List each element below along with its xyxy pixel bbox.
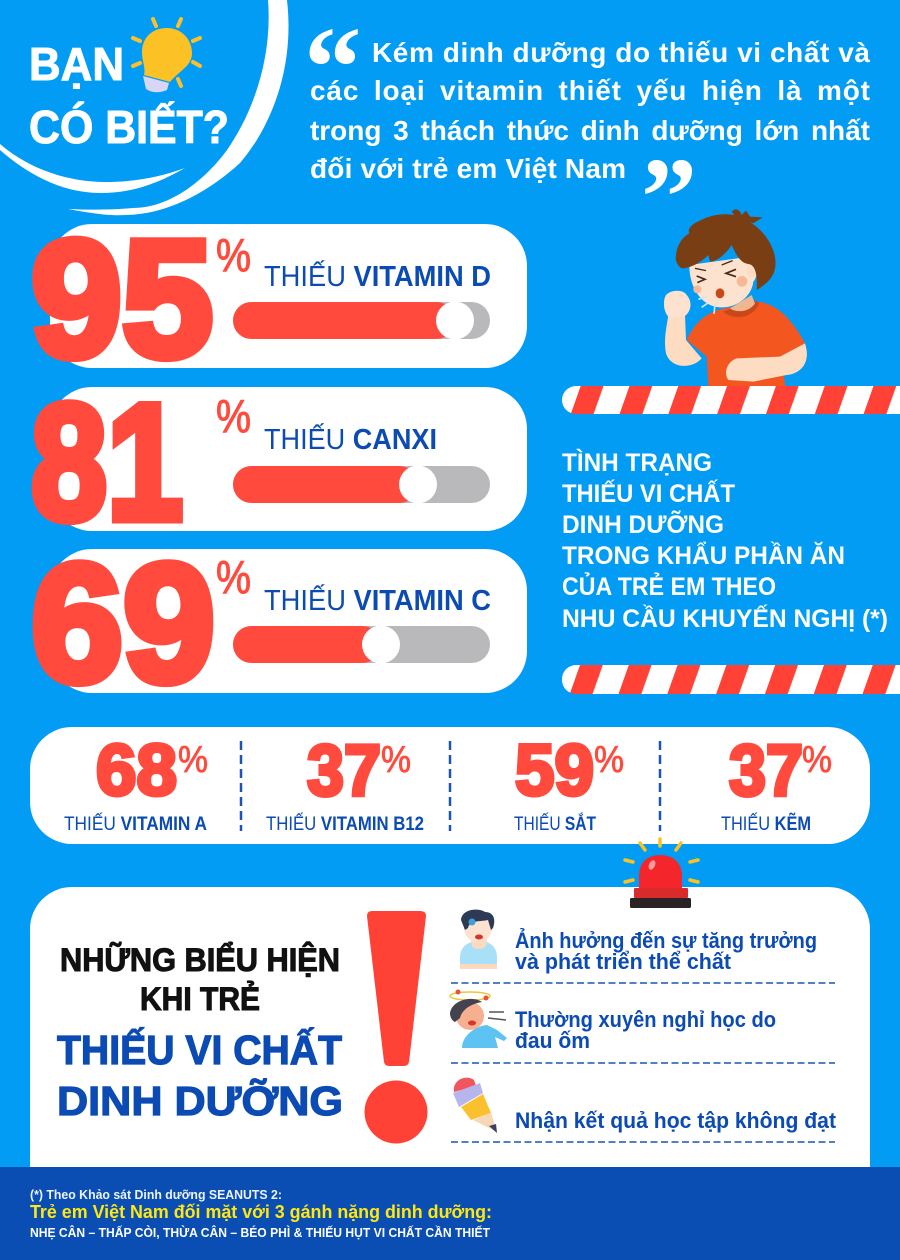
symptoms heading (57, 942, 343, 1124)
section title: THIẾU VI CHẤT (562, 479, 735, 508)
symptoms heading: KHI TRẺ (140, 981, 260, 1017)
quote text: đối với trẻ em Việt Nam (310, 153, 626, 184)
symptoms heading: THIẾU VI CHẤT (57, 1027, 342, 1073)
item 2 text: Thường xuyên nghỉ học do (515, 1007, 776, 1032)
big number: 81 (31, 370, 183, 554)
progress bar (233, 626, 490, 664)
progress bar (233, 302, 490, 340)
icon: closing quote: ” (641, 136, 697, 260)
stat: zinc: 37 (729, 731, 803, 811)
stat: vitamin A: 68 (96, 731, 177, 811)
symptoms heading: DINH DƯỠNG (57, 1078, 343, 1124)
footer (0, 1167, 900, 1260)
icon: red siren (625, 839, 698, 908)
icon: tired child (460, 910, 497, 969)
stat: vitamin A: THIẾU VITAMIN A (64, 813, 207, 835)
footer highlight: Trẻ em Việt Nam đối mặt với 3 gánh nặng dinh dưỡng: (30, 1202, 492, 1222)
item 2 text (515, 1007, 776, 1053)
icon: coughing boy (664, 209, 807, 387)
section title: CỦA TRẺ EM THEO (562, 571, 776, 601)
badge title (29, 38, 229, 153)
badge title: CÓ BIẾT? (29, 101, 229, 153)
stat: iron: % (594, 739, 624, 780)
stat: vitamin A (64, 731, 208, 835)
stat: zinc (721, 731, 832, 835)
striped band top (562, 386, 900, 414)
big number: 95 (31, 207, 213, 392)
section title: TRONG KHẨU PHẦN ĂN (562, 541, 845, 570)
stat card: canxi 81% (31, 370, 527, 554)
item 1 text: Ảnh hưởng đến sự tăng trưởng (515, 928, 817, 953)
section title: TÌNH TRẠNG (562, 448, 712, 477)
symptoms heading: NHỮNG BIỂU HIỆN (60, 942, 340, 978)
percent sign: % (216, 390, 251, 442)
quote text (310, 37, 870, 184)
stat: iron: THIẾU SẮT (514, 813, 596, 835)
stat: vitamin B12 (266, 731, 424, 835)
label: THIẾU VITAMIN D (264, 259, 491, 293)
stat: zinc: THIẾU KẼM (721, 813, 811, 835)
progress bar (233, 466, 490, 504)
icon: opening quote: “ (304, 4, 362, 131)
item 1 text (515, 928, 817, 974)
stat: vitamin B12: % (381, 739, 411, 780)
quote text: trong 3 thách thức dinh dưỡng lớn nhất (310, 115, 870, 146)
item 3 text: Nhận kết quả học tập không đạt (515, 1108, 837, 1133)
panel: other deficiencies (30, 727, 870, 844)
stat: iron (514, 731, 624, 835)
icon: dizzy child (450, 990, 507, 1048)
stat: vitamin B12: 37 (307, 731, 381, 811)
quote block (304, 4, 870, 260)
icon: light bulb (133, 19, 200, 92)
section title (562, 448, 888, 633)
source note: (*) Theo Khảo sát Dinh dưỡng SEANUTS 2: (30, 1187, 282, 1202)
quote text: các loại vitamin thiết yếu hiện là một (310, 75, 870, 106)
stat: iron: 59 (515, 731, 594, 811)
panel: symptoms (30, 887, 870, 1170)
item 2 text: đau ốm (515, 1028, 590, 1053)
icon: pencil (453, 1078, 497, 1133)
header badge (0, 0, 289, 215)
badge title: BẠN (29, 38, 124, 90)
stat: zinc: % (802, 739, 832, 780)
percent sign: % (216, 229, 251, 281)
striped band bottom (562, 665, 900, 694)
footer detail: NHẸ CÂN – THẤP CÒI, THỪA CÂN – BÉO PHÌ & THIẾU HỤT VI CHẤT CẦN THIẾT (30, 1225, 490, 1240)
label: THIẾU CANXI (264, 422, 437, 456)
big number: 69 (31, 529, 215, 717)
stat card: vitamin D 95% (31, 207, 527, 392)
icon: exclamation mark (364, 911, 428, 1144)
item 1 text: và phát triển thể chất (515, 949, 732, 974)
section title: DINH DƯỠNG (562, 509, 724, 539)
stat: vitamin B12: THIẾU VITAMIN B12 (266, 813, 424, 835)
stat: vitamin A: % (178, 739, 208, 780)
quote text: Kém dinh dưỡng do thiếu vi chất và (372, 37, 870, 68)
section title: NHU CẦU KHUYẾN NGHỊ (*) (562, 604, 888, 633)
percent sign: % (216, 551, 251, 603)
stat card: vitamin C 69% (31, 529, 527, 717)
label: THIẾU VITAMIN C (264, 583, 491, 617)
decorative arcs (0, 0, 289, 215)
